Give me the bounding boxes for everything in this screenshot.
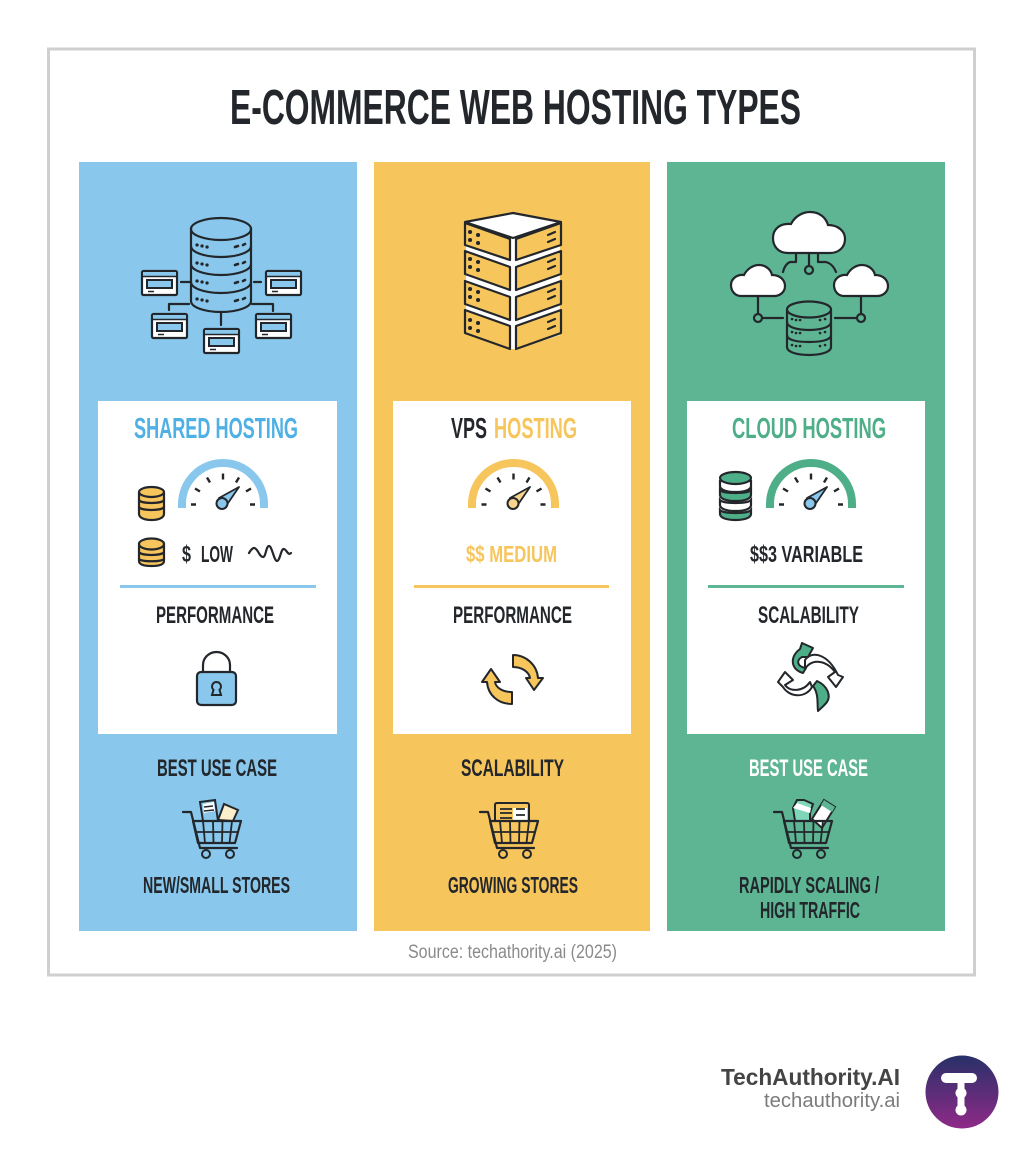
icon: wave	[249, 546, 291, 561]
column background: cloud	[667, 162, 945, 931]
label: best use case: BEST USE CASE	[157, 755, 277, 782]
brand url: techauthority.ai	[764, 1090, 900, 1112]
icon: green disk stack	[720, 472, 751, 520]
outer frame	[48, 49, 974, 975]
logo	[926, 1056, 998, 1128]
cost: low: $	[182, 541, 191, 567]
divider	[708, 585, 904, 588]
icon: coin stack small	[139, 538, 164, 566]
label: best use case: BEST USE CASE	[749, 755, 868, 782]
label: rapidly scaling / high traffic: HIGH TRAFFIC	[760, 897, 860, 923]
white card: cloud	[687, 401, 925, 734]
gauge: cloud	[770, 463, 852, 509]
heading: cloud hosting: CLOUD HOSTING	[732, 413, 886, 445]
column background: shared	[79, 162, 357, 931]
label: rapidly scaling / high traffic	[739, 872, 879, 923]
heading: vps hosting: HOSTING	[494, 413, 577, 445]
label: performance: PERFORMANCE	[453, 602, 572, 629]
icon: shopping cart with receipt	[480, 803, 538, 858]
panel: shared hosting	[79, 162, 357, 931]
source note: Source: techathority.ai (2025)	[408, 942, 617, 963]
label: scalability: SCALABILITY	[461, 755, 564, 782]
label: growing stores: GROWING STORES	[448, 872, 578, 898]
cost: medium: $$ MEDIUM	[466, 541, 557, 567]
label: scalability: SCALABILITY	[758, 602, 859, 629]
divider	[120, 585, 316, 588]
gauge: vps	[472, 463, 555, 509]
icon: clouds and database	[731, 212, 888, 355]
cost: variable: $$3 VARIABLE	[750, 541, 863, 567]
white card: shared	[98, 401, 337, 734]
white card: vps	[393, 401, 631, 734]
gauge: shared	[182, 463, 264, 509]
icon: shopping cart	[183, 800, 241, 858]
label: new/small stores: NEW/SMALL STORES	[143, 872, 290, 898]
icon: server stack	[465, 213, 561, 349]
cost: low: LOW	[201, 541, 233, 567]
icon: padlock	[197, 652, 236, 705]
icon: swirl arrows	[778, 643, 843, 711]
heading: vps hosting: VPS	[451, 413, 487, 445]
divider	[414, 585, 609, 588]
heading: shared hosting: SHARED HOSTING	[134, 413, 298, 445]
panel: vps hosting	[374, 162, 650, 931]
heading: vps hosting	[451, 413, 577, 445]
label: rapidly scaling / high traffic: RAPIDLY SCALING /	[739, 872, 879, 898]
brand name: TechAuthority.AI	[721, 1064, 900, 1090]
cost: low	[182, 541, 233, 567]
icon: refresh arrows	[482, 655, 543, 704]
icon: coin stack	[139, 487, 164, 520]
label: performance: PERFORMANCE	[156, 602, 274, 629]
icon: shopping cart with goods	[774, 800, 835, 858]
icon: database with connected websites	[142, 218, 301, 353]
column background: vps	[374, 162, 650, 931]
panel: cloud hosting	[667, 162, 945, 931]
